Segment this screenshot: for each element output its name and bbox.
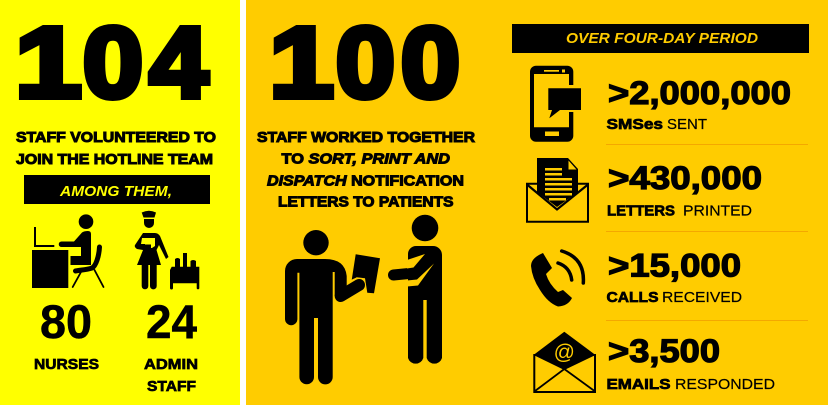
heading: staff worked together: DISPATCH NOTIFICATION <box>267 172 464 190</box>
stat: calls received: CALLS <box>606 289 658 306</box>
big number 100: 0 <box>336 6 395 118</box>
big number 104: 1 <box>15 7 82 119</box>
banner: among them: AMONG THEM, <box>59 183 172 200</box>
panel: hotline volunteers <box>0 0 240 405</box>
heading: staff worked together: LETTERS TO PATIENTS <box>278 194 454 210</box>
big number 100: 1 <box>269 7 334 118</box>
stat: emails responded: >3,500 <box>608 333 720 369</box>
big number 100 <box>269 6 460 118</box>
banner: among them <box>24 175 210 204</box>
stat: emails responded: RESPONDED <box>675 376 775 393</box>
icon: letter in envelope <box>527 158 588 222</box>
big number 104: 0 <box>83 8 143 119</box>
stat: SMSes sent: >2,000,000 <box>608 75 791 111</box>
stat: calls received: RECEIVED <box>662 289 742 306</box>
heading: staff worked together: TO SORT, PRINT AND <box>282 150 450 168</box>
stat: emails responded <box>606 333 775 393</box>
stat: 24 admin staff <box>144 295 198 395</box>
heading: staff worked together <box>257 129 475 210</box>
big number 104: 4 <box>149 7 208 118</box>
banner: over four-day period: OVER FOUR-DAY PERIOD <box>566 30 758 47</box>
stat: letters printed: PRINTED <box>683 202 752 220</box>
stat: 24 admin staff: ADMIN <box>144 356 198 373</box>
stat: SMSes sent <box>606 75 791 133</box>
icon: nurse seated at desk <box>32 214 104 288</box>
icon: email envelope with at sign <box>534 332 596 392</box>
stat: SMSes sent: SMSes <box>606 116 663 133</box>
stat: calls received: >15,000 <box>608 248 741 284</box>
panel: notification letters <box>246 0 828 405</box>
icon: two people exchanging a letter <box>285 215 442 384</box>
big number 104 <box>15 7 208 119</box>
icon: telephone handset with signal <box>531 251 583 306</box>
stat: letters printed: LETTERS <box>607 202 675 220</box>
stat: calls received <box>606 248 742 306</box>
stat: 24 admin staff: STAFF <box>147 378 196 395</box>
stat: 80 nurses: NURSES <box>34 356 99 373</box>
stat: 80 nurses: 80 <box>40 295 92 348</box>
heading: staff volunteered: JOIN THE HOTLINE TEAM <box>16 151 213 168</box>
big number 100: 0 <box>401 6 460 118</box>
heading: staff worked together: STAFF WORKED TOGETHER <box>257 129 475 146</box>
icon: admin staff with cart <box>135 211 199 290</box>
icon: email envelope with at sign: @ <box>554 341 575 364</box>
stat: letters printed: >430,000 <box>608 160 762 196</box>
stat: letters printed <box>607 160 762 220</box>
stat: emails responded: EMAILS <box>606 376 670 393</box>
banner: over four-day period <box>512 24 809 53</box>
stat: 24 admin staff: 24 <box>146 295 197 348</box>
stat: 80 nurses <box>34 295 99 373</box>
heading: staff volunteered <box>16 129 216 168</box>
stat: SMSes sent: SENT <box>667 116 707 133</box>
icon: smartphone with speech bubble <box>530 66 581 142</box>
heading: staff volunteered: STAFF VOLUNTEERED TO <box>16 129 216 146</box>
